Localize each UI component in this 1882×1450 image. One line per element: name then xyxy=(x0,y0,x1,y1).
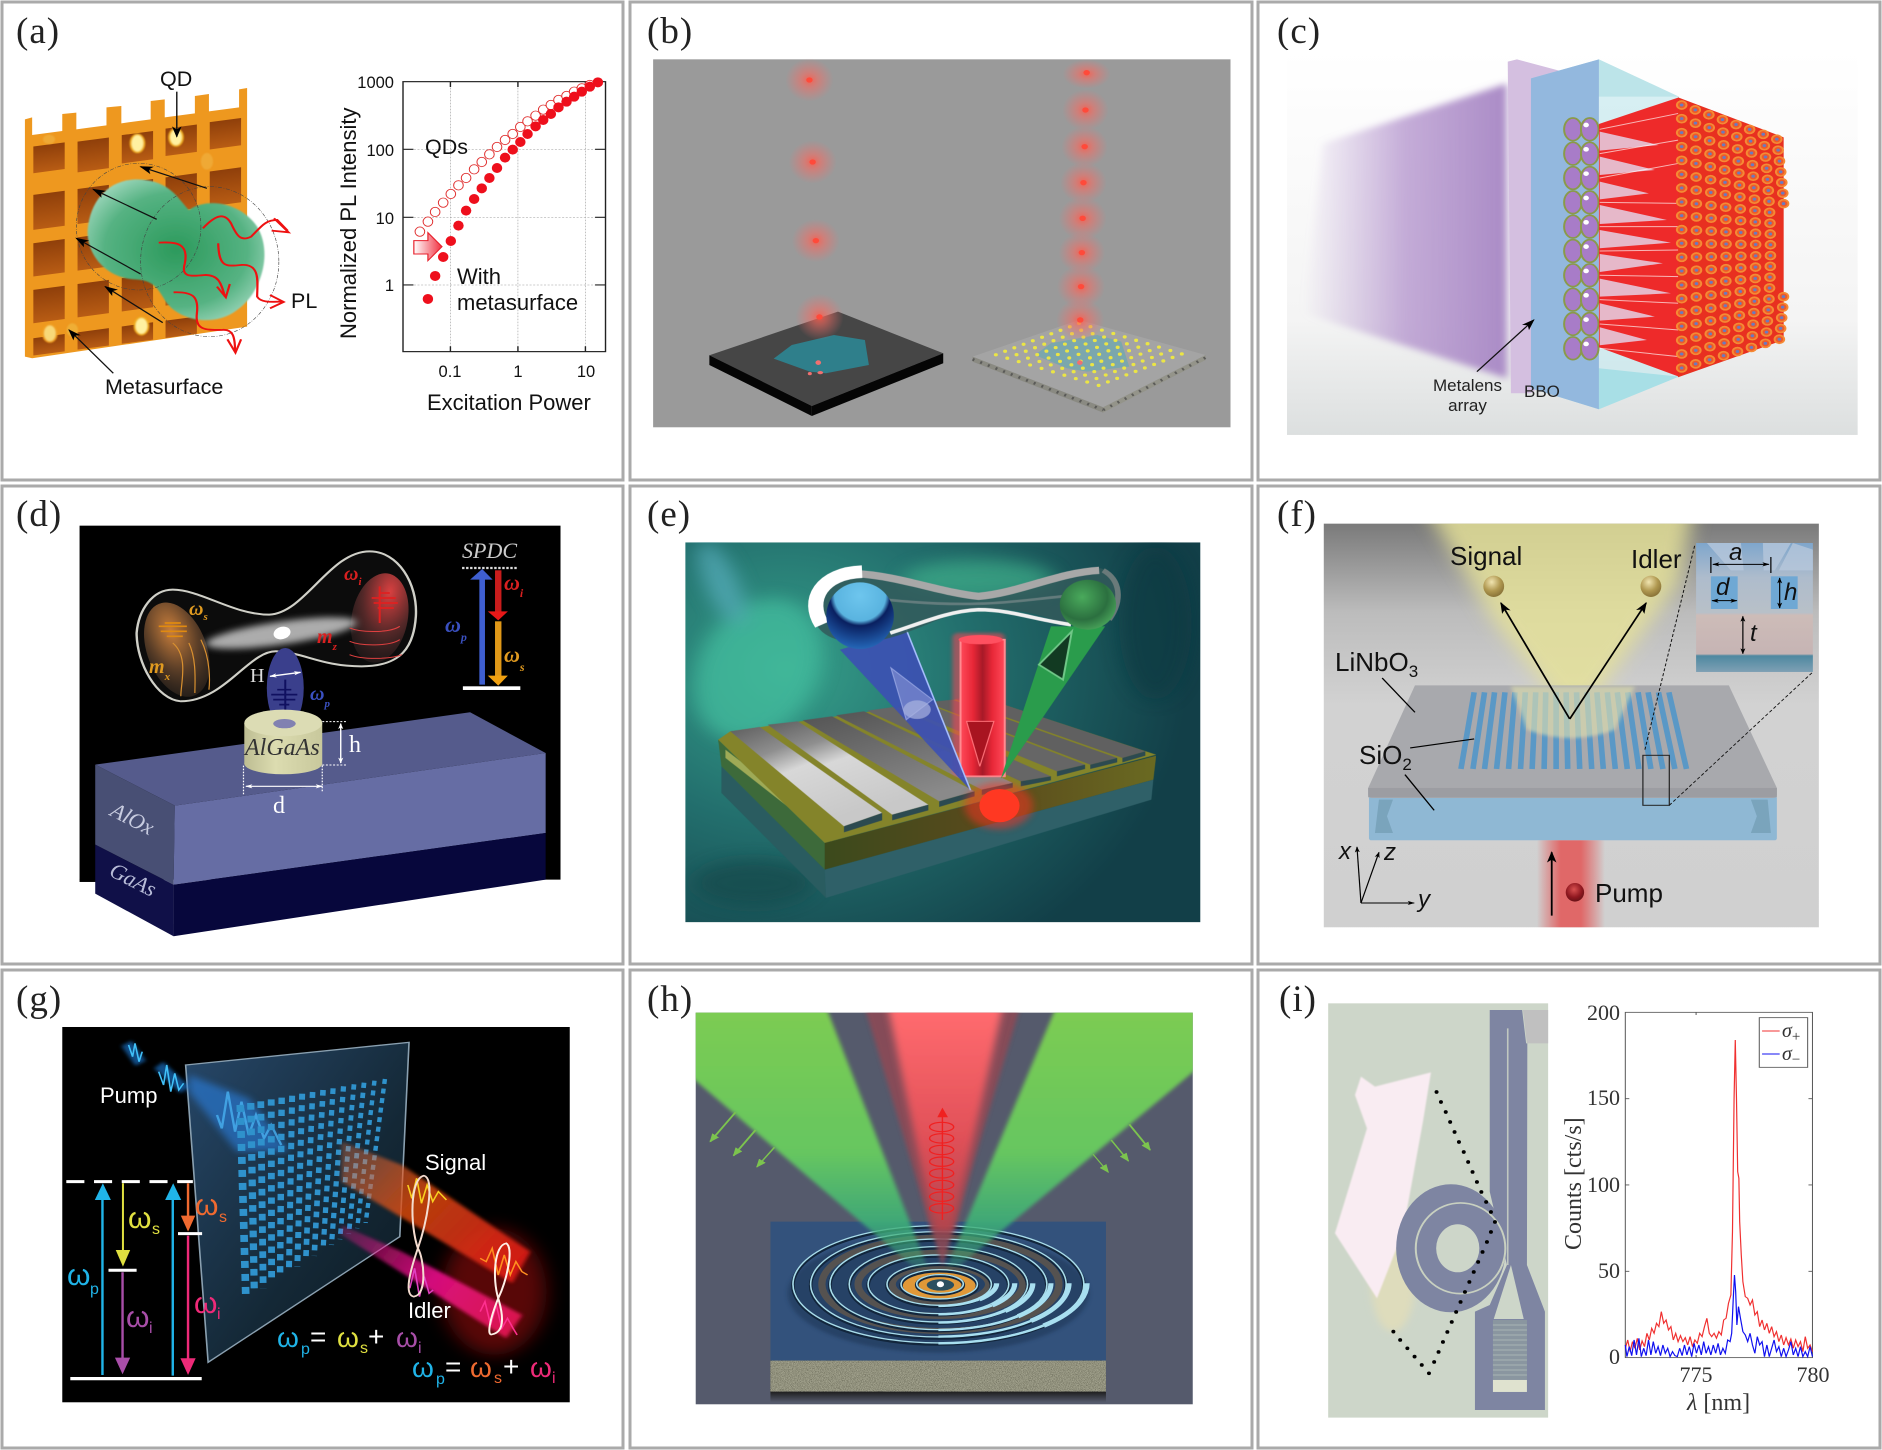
equation one: i xyxy=(418,1340,422,1357)
illustration: two photon-pair emitters xyxy=(653,58,1231,427)
red pump column xyxy=(952,633,1005,776)
equation one xyxy=(277,1321,422,1358)
black substrate left xyxy=(709,312,943,416)
text: panel i labels: 775 xyxy=(1680,1362,1712,1387)
text: panel d labels: m xyxy=(317,626,333,648)
label b: (b) xyxy=(647,11,693,52)
text: panel f labels: Pump xyxy=(1595,878,1663,908)
text: panel f labels: Idler xyxy=(1631,544,1682,574)
energy diagram xyxy=(66,1182,202,1379)
black arrows xyxy=(69,92,207,373)
spheres xyxy=(1483,576,1661,902)
quantum dots xyxy=(43,129,213,342)
text: panel i labels: + xyxy=(1792,1029,1800,1045)
label d: (d) xyxy=(16,494,62,535)
green polarisation arrows xyxy=(710,1112,1150,1172)
nebula background xyxy=(671,538,1200,922)
yellow cone xyxy=(1422,524,1703,686)
text: panel g labels: s xyxy=(152,1221,160,1238)
illustration: device photo and spectrum xyxy=(1328,1003,1812,1418)
text: panel g labels: Pump xyxy=(100,1083,157,1108)
text: panel a labels: 100 xyxy=(366,142,394,160)
text: panel i labels: σ xyxy=(1782,1043,1792,1065)
text: panel a labels xyxy=(105,67,595,415)
text: panel i labels: λ [nm] xyxy=(1686,1390,1750,1416)
blue spectrum xyxy=(1625,1275,1812,1357)
white beam lines xyxy=(1600,113,1679,357)
yellow haze xyxy=(1371,1232,1415,1332)
device xyxy=(1396,1010,1548,1410)
text: panel g labels: s xyxy=(219,1209,227,1226)
text: panel a labels: Normalized PL Intensity xyxy=(336,107,361,339)
panel: e xyxy=(630,486,1252,964)
pump beam xyxy=(127,1043,289,1152)
SPDC energy diagram xyxy=(462,568,520,690)
text: panel d labels: s xyxy=(519,660,525,674)
text: panel d labels: H xyxy=(250,665,264,687)
purple pump beam xyxy=(1303,83,1507,378)
illustration: metalens array on BBO xyxy=(1287,50,1858,435)
text: panel d labels: AlGaAs xyxy=(243,735,320,761)
red signal and idler cones xyxy=(1599,97,1679,377)
text: panel d labels: d xyxy=(273,793,285,819)
axes xyxy=(1357,847,1414,903)
grid frame xyxy=(25,88,247,358)
text: panel g labels: ω xyxy=(67,1259,90,1292)
spiral rings xyxy=(793,1226,1087,1344)
text: panel f labels: Signal xyxy=(1450,541,1522,571)
green emission blob xyxy=(88,179,264,320)
text: panel f labels: z xyxy=(1383,839,1396,866)
filled circles: with metasurface xyxy=(423,77,603,304)
red block behind rings xyxy=(1678,97,1784,377)
text: panel d labels: ω xyxy=(504,570,520,595)
equation one: p xyxy=(301,1341,310,1358)
lavender gaps between cones xyxy=(1600,132,1671,345)
text: panel i labels: 150 xyxy=(1587,1085,1620,1110)
illustration: AlGaAs nanocylinder xyxy=(80,526,561,936)
text: panel f labels: SiO xyxy=(1359,740,1402,770)
panel: i xyxy=(1258,970,1880,1448)
text: panel a labels: QDs xyxy=(425,135,468,159)
text: panel i labels xyxy=(1561,1000,1830,1416)
open circles: QDs xyxy=(415,80,595,236)
metalens plate xyxy=(1508,59,1563,393)
nano-pillar array xyxy=(240,1079,385,1300)
text: panel d labels: ω xyxy=(445,612,461,637)
text: panel i labels: 0 xyxy=(1609,1344,1620,1369)
label a: (a) xyxy=(16,11,60,52)
equation one: + xyxy=(368,1321,384,1352)
slab front faces xyxy=(825,756,1156,898)
illustration: metasurface with quantum dots xyxy=(25,77,606,373)
text: panel g labels: p xyxy=(90,1281,99,1298)
text: panel d labels: p xyxy=(323,698,330,710)
grey background xyxy=(1324,524,1819,927)
blue sphere xyxy=(826,582,894,649)
text: panel c labels: Metalens xyxy=(1433,376,1502,395)
text: panel d labels: GaAs xyxy=(106,857,161,902)
SiO2 ridges xyxy=(1461,692,1686,769)
substrate block xyxy=(95,712,546,936)
glass bowtie xyxy=(814,568,1120,643)
pink flake xyxy=(1335,1072,1431,1298)
label i: (i) xyxy=(1279,979,1317,1020)
label e: (e) xyxy=(647,494,691,535)
spiral centre xyxy=(927,1279,954,1291)
text: panel a labels: QD xyxy=(160,67,192,91)
text: panel f labels: x xyxy=(1338,838,1352,865)
black background xyxy=(80,526,561,880)
equation two: = xyxy=(445,1351,461,1382)
text: panel d labels: SPDC xyxy=(462,538,517,563)
text: panel d labels: h xyxy=(349,732,361,758)
text: panel d labels: p xyxy=(460,630,467,644)
text: panel d labels xyxy=(105,538,525,902)
patterned substrate right xyxy=(973,320,1206,413)
V arrows xyxy=(1501,603,1646,916)
micrograph background xyxy=(1328,1003,1548,1418)
equation one: s xyxy=(360,1340,368,1357)
zoom box xyxy=(1643,755,1669,805)
equation two: s xyxy=(494,1370,502,1387)
equation one: ω xyxy=(396,1322,418,1353)
equation two: i xyxy=(552,1370,556,1387)
glowing photon pairs left xyxy=(785,58,844,340)
red photoluminescence arrows xyxy=(159,216,288,353)
text: panel f labels: LiNbO xyxy=(1335,647,1409,677)
slab left faces xyxy=(718,740,838,898)
text: panel f labels: h xyxy=(1784,579,1797,606)
text: panel a labels: 1 xyxy=(513,363,523,381)
grating base xyxy=(718,696,1156,843)
bowtie mode shape xyxy=(133,551,416,703)
slate background xyxy=(696,1013,1193,1404)
text: panel f labels: 2 xyxy=(1402,755,1412,774)
text: panel g labels: i xyxy=(149,1320,153,1337)
pink arrow xyxy=(414,233,442,261)
idler beam xyxy=(342,1225,522,1338)
AlGaAs cylinder xyxy=(244,710,322,774)
grey background xyxy=(653,59,1231,427)
text: panel g labels: ω xyxy=(195,1189,218,1222)
text: panel i labels: Counts [cts/s] xyxy=(1561,1117,1587,1250)
leader lines xyxy=(1382,678,1474,810)
entangled wave loops xyxy=(408,1176,528,1335)
text: panel a labels: 1 xyxy=(385,277,394,295)
substrate xyxy=(770,1222,1106,1402)
panel: g xyxy=(2,970,623,1448)
label h: (h) xyxy=(647,979,693,1020)
text: panel c labels: BBO xyxy=(1524,382,1560,401)
text: panel a labels: PL xyxy=(291,289,317,313)
text: panel g labels: Signal xyxy=(425,1150,486,1175)
equation two: ω xyxy=(530,1352,552,1383)
grating bars xyxy=(730,696,1145,832)
text: panel g labels: Idler xyxy=(408,1298,451,1323)
text: panel a labels: 1000 xyxy=(357,74,394,92)
text: panel i labels: 780 xyxy=(1796,1362,1830,1387)
text: panel d labels: x xyxy=(164,671,171,683)
glowing photon pairs right xyxy=(1056,59,1111,342)
text: panel f labels: 3 xyxy=(1409,662,1418,681)
yellow overlay on ridges xyxy=(1511,686,1635,738)
equation two: ω xyxy=(470,1352,492,1383)
text: panel a labels: Metasurface xyxy=(105,375,223,399)
label f: (f) xyxy=(1277,494,1317,535)
illustration: grating and entangled spheres xyxy=(671,538,1200,922)
text: panel f labels xyxy=(1335,539,1797,913)
dashed zoom lines xyxy=(1645,545,1813,805)
equation two: ω xyxy=(412,1352,434,1383)
orange ring grid xyxy=(1682,105,1784,368)
glass substrate xyxy=(1369,796,1777,840)
polarisation helix xyxy=(930,1109,954,1220)
blue signal cone xyxy=(840,630,971,790)
text: panel i labels: 50 xyxy=(1598,1258,1620,1283)
text: panel f labels: d xyxy=(1716,574,1730,601)
text: panel d labels: AlOx xyxy=(105,796,159,840)
text: panel g labels: ω xyxy=(128,1202,151,1235)
text: panel g labels: ω xyxy=(194,1287,217,1320)
equation two: + xyxy=(503,1351,519,1382)
green idler cone xyxy=(1001,626,1105,779)
equation two: p xyxy=(436,1371,445,1388)
equation two xyxy=(412,1351,556,1388)
text: panel g labels: ω xyxy=(126,1301,149,1334)
text: panel c labels xyxy=(1433,376,1560,415)
panel: d xyxy=(2,486,623,964)
text: panel i labels: 200 xyxy=(1587,1000,1620,1025)
LiNbO3 film xyxy=(1368,685,1777,798)
text: panel d labels: ω xyxy=(310,683,324,705)
equation one: ω xyxy=(337,1322,359,1353)
text: panel a labels: metasurface xyxy=(457,290,578,315)
plot frame and grid xyxy=(403,82,606,352)
illustration: dielectric metasurface SPDC xyxy=(62,1027,570,1402)
text: panel g labels xyxy=(67,1083,556,1388)
spectrum frame xyxy=(1625,1012,1812,1358)
panel: f xyxy=(1258,486,1880,964)
illustration: spiral metasurface xyxy=(681,998,1208,1404)
label g: (g) xyxy=(16,979,62,1020)
green beam left xyxy=(696,1012,928,1268)
panel: h xyxy=(630,970,1252,1448)
red beam xyxy=(862,998,1023,1267)
label c: (c) xyxy=(1277,11,1321,52)
blue pump beam xyxy=(267,648,304,728)
metalens columns xyxy=(1564,118,1599,360)
text: panel g labels: i xyxy=(217,1306,221,1323)
panel: c xyxy=(1258,2,1880,480)
text: panel a labels: With xyxy=(457,264,501,289)
text: panel a labels: Excitation Power xyxy=(427,390,591,415)
text: panel a labels: 10 xyxy=(577,363,595,381)
text: panel d labels: ω xyxy=(344,563,358,585)
dotted V guide xyxy=(1391,1090,1497,1375)
text: panel f labels: a xyxy=(1729,539,1742,566)
text: panel i labels: 100 xyxy=(1587,1172,1620,1197)
green sphere xyxy=(1060,580,1116,630)
text: panel d labels: ω xyxy=(504,642,520,667)
text: panel d labels: i xyxy=(520,586,524,600)
red spectrum xyxy=(1625,1040,1812,1352)
text: panel d labels: i xyxy=(358,576,362,588)
inset xyxy=(1696,543,1813,672)
H arrow xyxy=(270,672,301,676)
text: panel a labels: 0.1 xyxy=(439,363,461,381)
illustration: LiNbO3 metasurface xyxy=(1324,503,1819,927)
text: panel d labels: m xyxy=(149,656,165,678)
text: panel i labels: σ xyxy=(1782,1020,1792,1042)
panel: a xyxy=(2,2,623,480)
dashed spheres xyxy=(76,163,279,337)
panel: b xyxy=(630,2,1252,480)
soft background xyxy=(1287,50,1858,435)
dimension markers xyxy=(243,722,346,796)
green beam right xyxy=(946,1012,1193,1267)
text: panel d labels: ω xyxy=(189,598,203,620)
text: panel a labels: 10 xyxy=(376,210,394,228)
equation one: = xyxy=(310,1321,326,1352)
legend box xyxy=(1759,1018,1808,1067)
text: panel f labels: t xyxy=(1750,620,1758,647)
BBO crystal xyxy=(1531,59,1679,409)
red spot xyxy=(965,782,1033,829)
text: panel f labels: y xyxy=(1416,886,1432,913)
pump beam xyxy=(1537,840,1605,927)
text: panel i labels: − xyxy=(1792,1052,1800,1068)
red halo xyxy=(442,1228,546,1355)
arrow: metalens array xyxy=(1477,320,1534,372)
text: panel c labels: array xyxy=(1448,396,1487,415)
signal beam xyxy=(342,1142,530,1283)
text: panel d labels: z xyxy=(332,641,338,653)
equation one: ω xyxy=(277,1322,299,1353)
arrowheads xyxy=(95,1183,196,1375)
transparent plate xyxy=(186,1042,409,1362)
black background xyxy=(62,1027,570,1402)
text: panel d labels: s xyxy=(202,611,208,623)
